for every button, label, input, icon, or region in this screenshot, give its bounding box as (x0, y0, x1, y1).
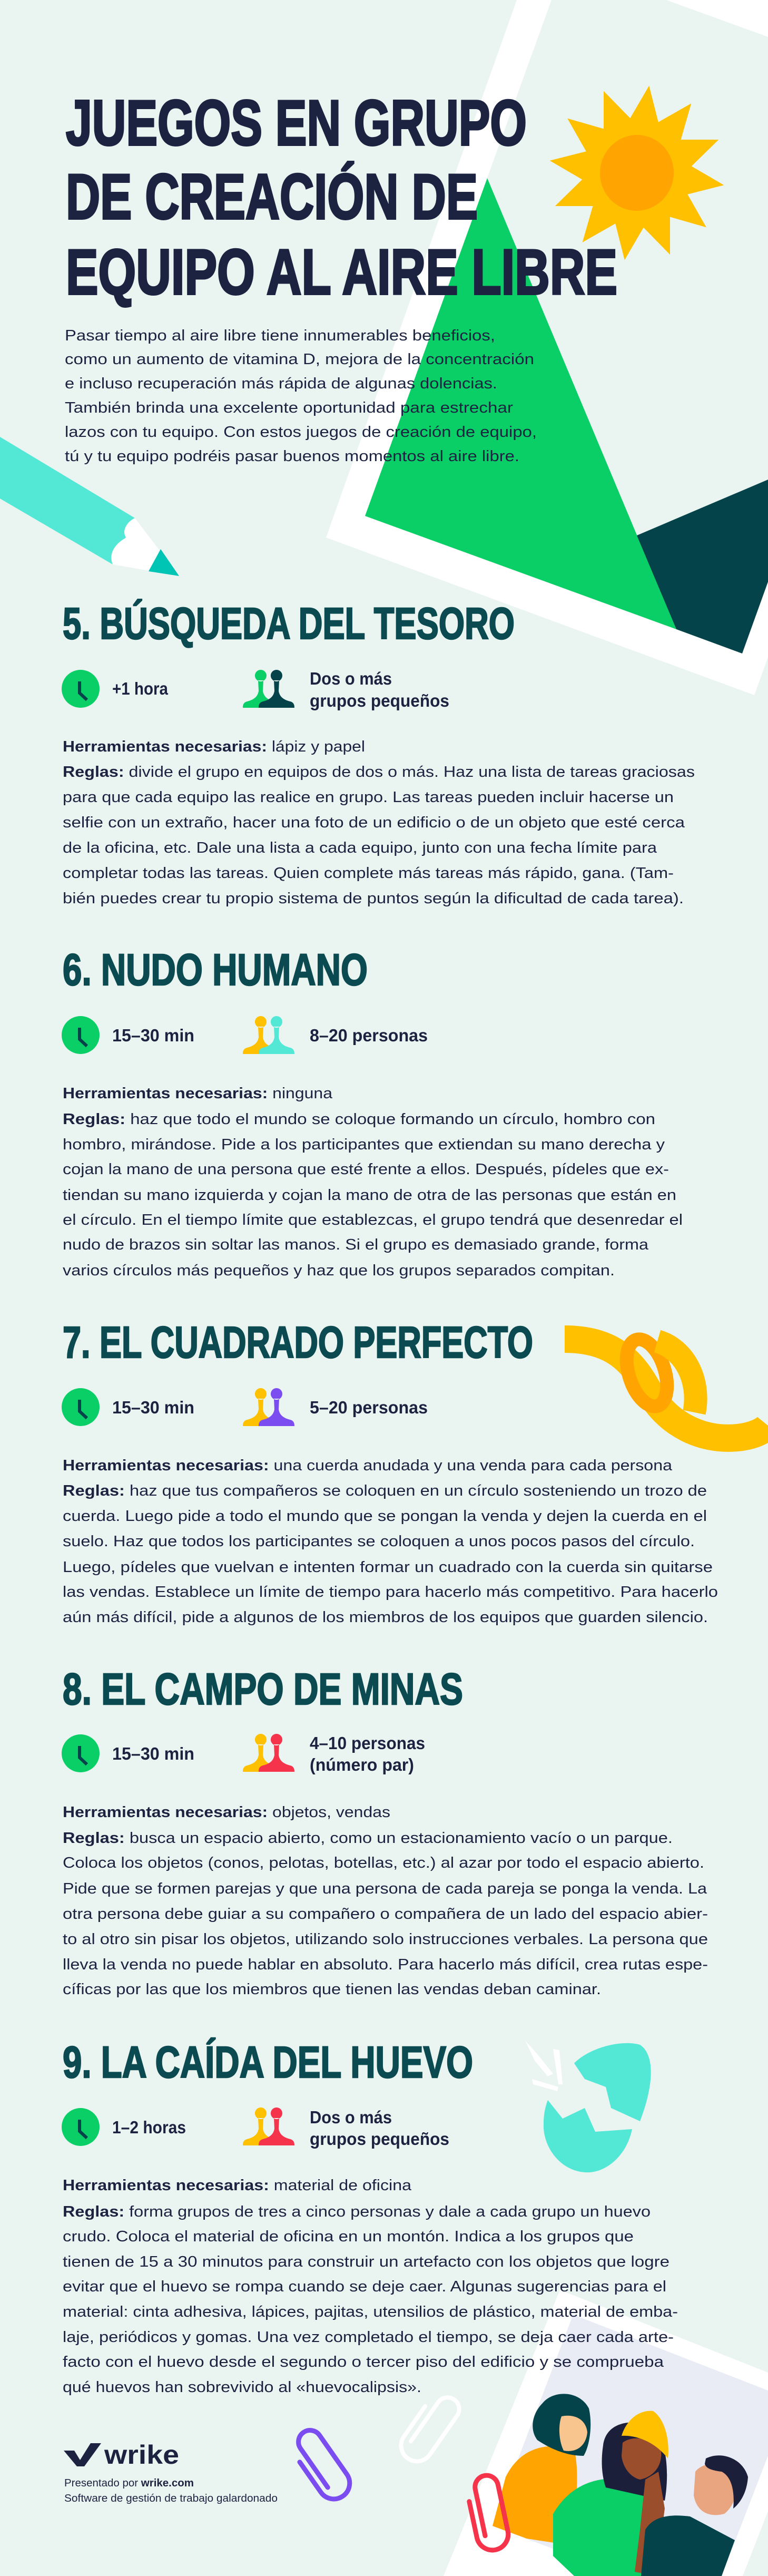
section 5 info row: +1 hora (112, 679, 169, 698)
photo frame decoration: top (326, 0, 768, 695)
icon: sun (537, 73, 736, 272)
intro text: tú y tu equipo podréis pasar buenos momentos al aire libre. (65, 448, 519, 465)
section 8 body: Herramientas necesarias: objetos, vendas (63, 1804, 390, 1821)
wrike logo: wrike (104, 2440, 179, 2470)
section 7 body: cuerda. Luego pide a todo el mundo que se pongan la venda y dejen la cuerda en el (63, 1508, 707, 1525)
section 5 heading: 5. BÚSQUEDA DEL TESORO (63, 599, 515, 648)
section 8 body: Reglas: busca un espacio abierto, como un estacionamiento vacío o un parque. (63, 1830, 673, 1847)
section 8 body: lleva la venda no puede hablar en absoluto. Para hacerlo más difícil, crea rutas espe- (63, 1956, 708, 1973)
section 6 body (63, 1085, 683, 1279)
wrike logo (64, 2440, 179, 2470)
section 7 info row: 15–30 min (112, 1398, 194, 1417)
section 5 info row (62, 669, 449, 710)
icon: pawns (243, 670, 294, 708)
section 8 body (63, 1804, 708, 1998)
section 5 body: Herramientas necesarias: lápiz y papel (63, 738, 365, 755)
section 8 body: to al otro sin pisar los objetos, utilizando solo instrucciones verbales. La persona que (63, 1931, 708, 1948)
person: right man (641, 2455, 748, 2576)
person: center woman (553, 2411, 668, 2576)
section 9 body: material: cinta adhesiva, lápices, pajitas, utensilios de plástico, material de emba- (63, 2304, 678, 2320)
section 9 body (63, 2177, 678, 2396)
section 6 info row (62, 1016, 428, 1054)
icon: purple paperclip (287, 2426, 356, 2505)
icon: clock (62, 670, 100, 708)
section 5 body: bién puedes crear tu propio sistema de puntos según la dificultad de cada tarea). (63, 890, 684, 907)
section 7 body (63, 1457, 718, 1626)
section 9 body: Herramientas necesarias: material de oficina (63, 2177, 412, 2194)
section 8 body: Pide que se formen parejas y que una persona de cada pareja se ponga la venda. La (63, 1880, 707, 1897)
section 6 body: hombro, mirándose. Pide a los participantes que extiendan su mano derecha y (63, 1136, 665, 1153)
section 5 body: de la oficina, etc. Dale una lista a cada equipo, junto con una fecha límite para (63, 840, 657, 856)
section 8 body: otra persona debe guiar a su compañero o compañera de un lado del espacio abier- (63, 1906, 708, 1923)
title: JUEGOS EN GRUPO (66, 87, 527, 159)
section 9 body: evitar que el huevo se rompa cuando se deje caer. Algunas sugerencias para el (63, 2278, 666, 2295)
footer credit: Software de gestión de trabajo galardonado (64, 2493, 278, 2504)
section 9 body: tienen de 15 a 30 minutos para construir un artefacto con los objetos que logre (63, 2253, 669, 2270)
icon: red paperclip (465, 2473, 511, 2553)
intro text: También brinda una excelente oportunidad para estrechar (65, 399, 513, 416)
section 8 info row: 15–30 min (112, 1744, 194, 1763)
icon: clock (62, 1734, 100, 1772)
section 9 body: Reglas: forma grupos de tres a cinco personas y dale a cada grupo un huevo (63, 2203, 651, 2220)
section 5 info row: Dos o más (310, 669, 392, 688)
section 8 info row: 4–10 personas (310, 1733, 425, 1753)
section 6 body: varios círculos más pequeños y haz que los grupos separados compitan. (63, 1262, 615, 1279)
title (66, 87, 617, 308)
section 7 heading: 7. EL CUADRADO PERFECTO (63, 1318, 533, 1367)
section 6 heading: 6. NUDO HUMANO (63, 945, 368, 994)
section 5 info row: grupos pequeños (310, 691, 449, 710)
section 9 body: crudo. Coloca el material de oficina en un montón. Indica a los grupos que (63, 2228, 634, 2245)
section 7 body: Herramientas necesarias: una cuerda anudada y una venda para cada persona (63, 1457, 673, 1474)
section 6 body: tiendan su mano izquierda y cojan la mano de otra de las personas que están en (63, 1187, 676, 1204)
section 8 info row (62, 1733, 425, 1774)
icon: pawns (243, 1388, 294, 1426)
icon: pencil (0, 437, 179, 576)
intro text: como un aumento de vitamina D, mejora de la concentración (65, 351, 534, 368)
section 7 info row (62, 1388, 428, 1426)
icon: clock (62, 1388, 100, 1426)
section 9 body: qué huevos han sobrevivido al «huevocalipsis». (63, 2379, 421, 2396)
section 7 body: suelo. Haz que todos los participantes se coloquen a unos pocos pasos del círculo. (63, 1533, 695, 1550)
section 9 info row (62, 2107, 449, 2149)
section 6 body: nudo de brazos sin soltar las manos. Si el grupo es demasiado grande, forma (63, 1236, 649, 1253)
section 6 info row: 15–30 min (112, 1026, 194, 1045)
icon: pawns (243, 1734, 294, 1772)
icon: clock (62, 2108, 100, 2146)
icon: broken egg (525, 2041, 651, 2172)
section 5 body: selfie con un extraño, hacer una foto de un edificio o de un objeto que esté cerca (63, 814, 685, 831)
section 8 body: cíficas por las que los miembros que tienen las vendas deban caminar. (63, 1981, 601, 1998)
section 6 info row: 8–20 personas (310, 1026, 428, 1045)
section 6 body: Reglas: haz que todo el mundo se coloque formando un círculo, hombro con (63, 1111, 655, 1128)
section 7 body: aún más difícil, pide a algunos de los miembros de los equipos que guarden silencio. (63, 1609, 708, 1626)
section 5 body: para que cada equipo las realice en grupo. Las tareas pueden incluir hacerse un (63, 789, 674, 806)
intro text (65, 327, 537, 465)
section 9 info row: grupos pequeños (310, 2129, 449, 2149)
section 7 body: Luego, pídeles que vuelvan e intenten formar un cuadrado con la cuerda sin quitarse (63, 1559, 713, 1576)
mountain: dark (637, 480, 768, 653)
section 8 heading: 8. EL CAMPO DE MINAS (63, 1664, 463, 1714)
section 8 info row: (número par) (310, 1755, 414, 1774)
section 6 body: Herramientas necesarias: ninguna (63, 1085, 333, 1102)
intro text: e incluso recuperación más rápida de algunas dolencias. (65, 375, 497, 392)
section 9 body: facto con el huevo desde el segundo o tercer piso del edificio y se comprueba (63, 2354, 664, 2370)
section 7 body: las vendas. Establece un límite de tiempo para hacerlo más competitivo. Para hacerlo (63, 1584, 718, 1601)
section 6 body: el círculo. En el tiempo límite que establezcas, el grupo tendrá que desenredar el (63, 1212, 683, 1228)
section 5 body (63, 738, 695, 907)
section 9 body: laje, periódicos y gomas. Una vez completado el tiempo, se deja caer cada arte- (63, 2329, 674, 2346)
title: DE CREACIÓN DE (66, 161, 478, 232)
person: left woman (493, 2394, 590, 2545)
footer credit: Presentado por wrike.com (64, 2477, 194, 2489)
intro text: lazos con tu equipo. Con estos juegos de creación de equipo, (65, 424, 537, 441)
footer credit (64, 2477, 278, 2504)
icon: clock (62, 1016, 100, 1054)
section 5 body: completar todas las tareas. Quien complete más tareas más rápido, gana. (Tam- (63, 865, 674, 882)
intro text: Pasar tiempo al aire libre tiene innumerables beneficios, (65, 327, 495, 344)
section 6 body: cojan la mano de una persona que esté frente a ellos. Después, pídeles que ex- (63, 1161, 669, 1178)
icon: white paperclip (395, 2388, 464, 2467)
icon: pawns (243, 2107, 294, 2145)
icon: rope knot (565, 1334, 768, 1438)
section 7 info row: 5–20 personas (310, 1398, 428, 1417)
section 7 body: Reglas: haz que tus compañeros se coloquen en un círculo sosteniendo un trozo de (63, 1482, 707, 1499)
icon: pawns (243, 1016, 294, 1054)
mountain: green (365, 178, 676, 629)
section 5 body: Reglas: divide el grupo en equipos de dos o más. Haz una lista de tareas graciosas (63, 764, 695, 780)
section 9 heading: 9. LA CAÍDA DEL HUEVO (63, 2037, 473, 2087)
section 9 info row: Dos o más (310, 2107, 392, 2127)
section 8 body: Coloca los objetos (conos, pelotas, botellas, etc.) al azar por todo el espacio abierto. (63, 1855, 704, 1871)
photo frame with people (444, 2290, 768, 2576)
section 9 info row: 1–2 horas (112, 2118, 186, 2137)
